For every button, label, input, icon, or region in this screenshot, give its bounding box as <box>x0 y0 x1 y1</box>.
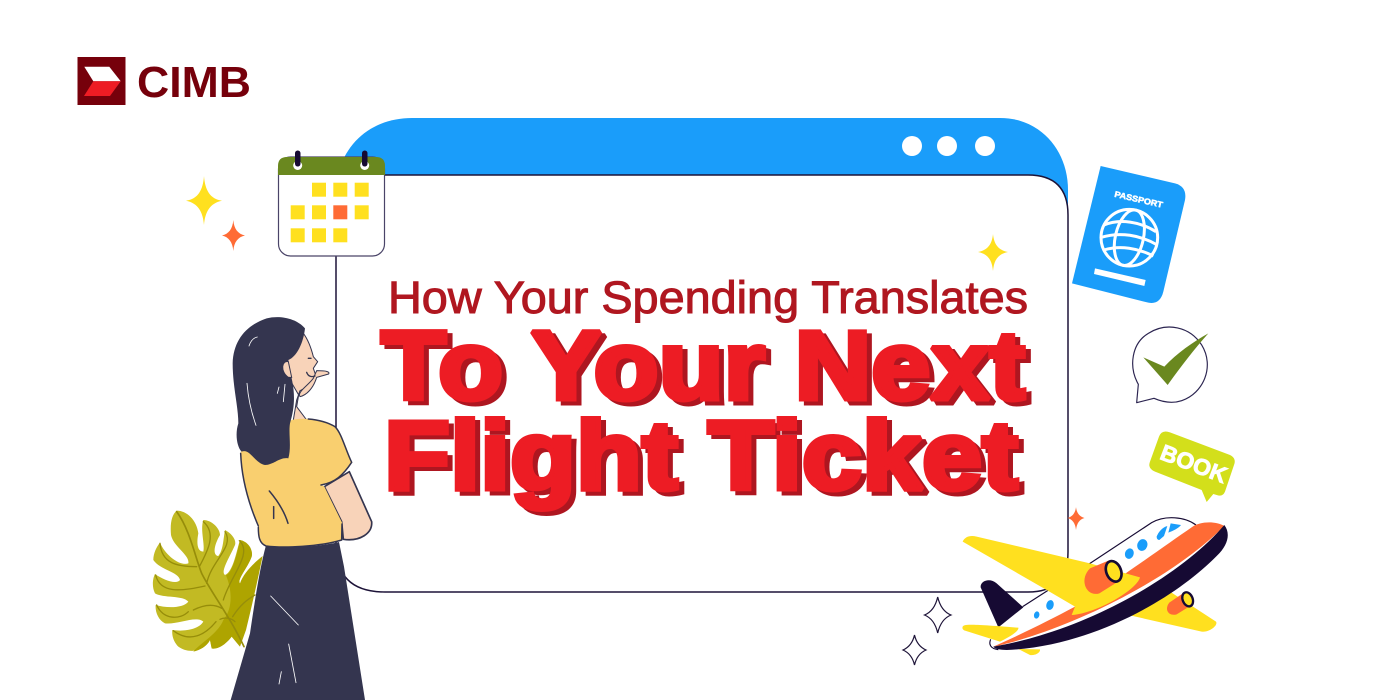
navy belly <box>993 525 1228 650</box>
main wing <box>963 536 1140 615</box>
neck and face <box>283 333 318 420</box>
sparkle: outline small <box>903 635 926 665</box>
monstera leaf <box>153 511 263 652</box>
hand <box>299 371 329 397</box>
sparkle: large yellow <box>186 176 222 225</box>
highlights <box>247 337 298 684</box>
windows <box>1033 523 1181 619</box>
arm <box>324 472 372 540</box>
tail fin <box>981 580 1023 627</box>
headline line 2: Flight Ticket <box>384 401 1018 510</box>
sparkle: orange <box>222 220 245 251</box>
shirt outlines <box>241 419 352 547</box>
CIMB logo <box>78 57 251 107</box>
fuselage <box>990 518 1223 647</box>
far engine <box>1167 591 1195 615</box>
globe <box>1101 207 1158 268</box>
CIMB logo: CIMB <box>137 58 251 107</box>
eye and smile <box>307 358 315 377</box>
orange stripe <box>993 522 1224 647</box>
passport: PASSPORT <box>1114 189 1164 210</box>
skirt <box>231 542 365 700</box>
woman figure <box>231 317 372 700</box>
check speech bubble <box>1133 327 1208 403</box>
sparkle: yellow in window <box>978 234 1008 271</box>
passport <box>1072 166 1185 303</box>
airplane <box>962 518 1228 655</box>
sparkle: orange near plane <box>1068 507 1084 530</box>
browser window <box>336 118 1068 592</box>
hair <box>233 317 305 465</box>
small rear fin <box>1018 649 1040 655</box>
sparkle: outline large <box>924 597 951 633</box>
tail wing <box>962 625 1018 642</box>
subtitle: How Your Spending Translates <box>388 272 1028 323</box>
shirt <box>241 419 352 547</box>
calendar icon <box>278 150 385 256</box>
BOOK tag <box>1149 431 1235 502</box>
headline line 1: To Your Next <box>381 311 1025 420</box>
near engine <box>1084 559 1124 594</box>
BOOK tag: BOOK <box>1157 439 1232 488</box>
ear <box>283 362 292 377</box>
far wing <box>1128 592 1216 632</box>
